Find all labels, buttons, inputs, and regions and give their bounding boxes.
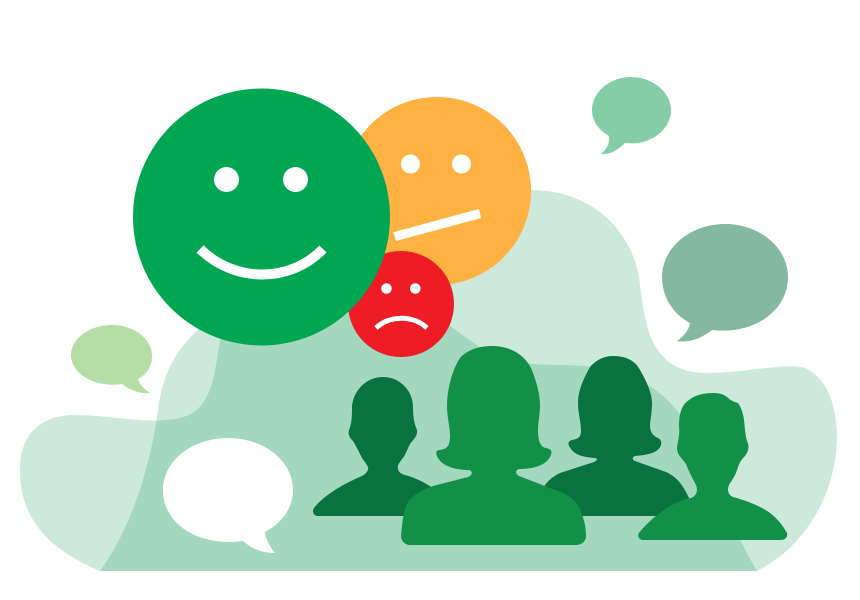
speech bubble: light green left <box>71 325 152 393</box>
background blob: right <box>100 190 837 571</box>
speech bubble: grey-green right <box>662 224 788 341</box>
sad face <box>348 251 454 357</box>
background blob: left <box>20 291 757 571</box>
person: dark back right <box>542 356 689 516</box>
happy face <box>133 88 390 346</box>
speech bubble: teal small top <box>592 77 671 154</box>
person: dark back left <box>313 377 436 516</box>
speech bubble: white bottom left <box>163 438 293 553</box>
neutral face <box>343 97 531 285</box>
person: front centre <box>401 346 586 545</box>
person: front right <box>638 393 787 540</box>
